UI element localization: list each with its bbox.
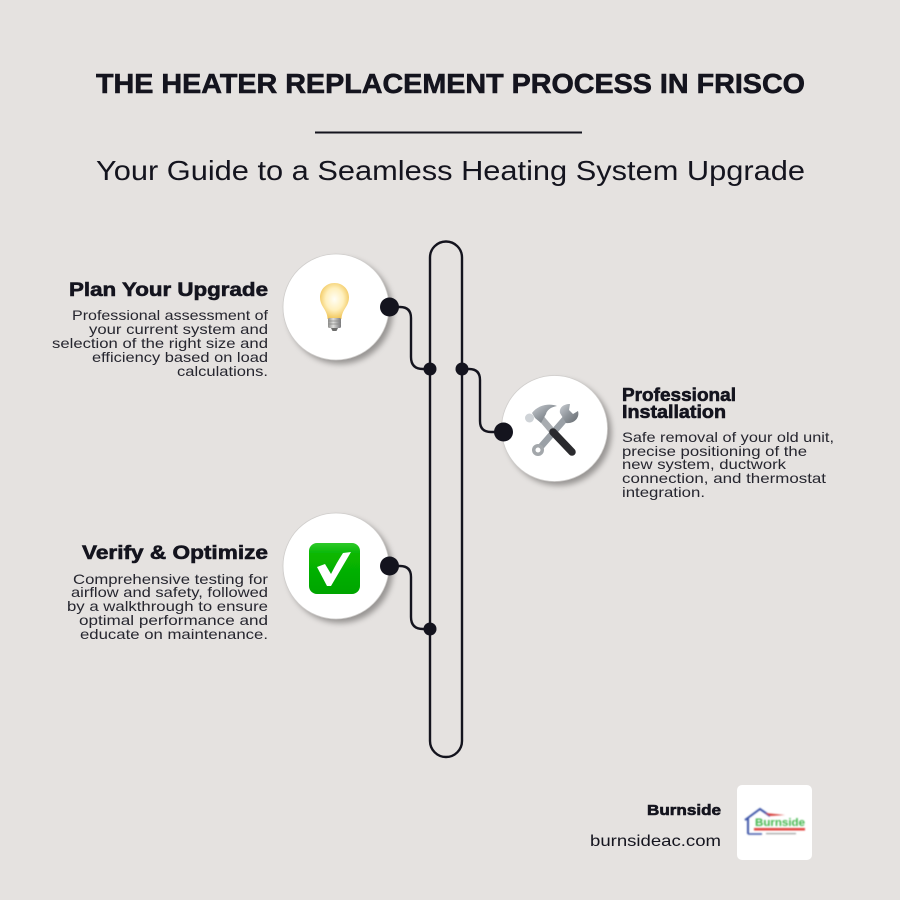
- step 3 node: [380, 556, 399, 576]
- footer website: burnsideac.com: [590, 833, 721, 850]
- step 2 timeline dot: [456, 362, 468, 376]
- icon: hammer and wrench: [525, 404, 578, 456]
- step 3 description: airflow and safety, followed: [71, 584, 268, 600]
- step 3: verify and optimize: [67, 513, 436, 642]
- step 3 timeline dot: [424, 622, 436, 636]
- step 3 description: Comprehensive testing for: [73, 571, 268, 587]
- step 2 description: new system, ductwork: [622, 456, 787, 472]
- step 2 connector: [462, 369, 504, 432]
- step 1 circle: [283, 254, 393, 364]
- step 3 description: [67, 571, 268, 642]
- step 2 heading: [622, 384, 736, 422]
- step 3 description: by a walkthrough to ensure: [67, 598, 268, 614]
- step 2 description: connection, and thermostat: [622, 470, 826, 486]
- step 3 description: educate on maintenance.: [80, 626, 268, 642]
- timeline pill: [430, 242, 462, 757]
- step 1 description: efficiency based on load: [92, 349, 268, 365]
- step 2 circle: [502, 376, 612, 486]
- logo: [737, 785, 812, 860]
- step 2 description: integration.: [622, 484, 705, 500]
- step 1 timeline dot: [424, 362, 436, 376]
- icon: green check mark: [309, 543, 360, 594]
- step 1 description: Professional assessment of: [72, 307, 268, 323]
- step 3 connector: [389, 566, 430, 629]
- step 2 heading: Professional: [622, 384, 736, 405]
- step 1 connector: [389, 307, 430, 369]
- logo: Burnside: [755, 817, 805, 829]
- footer brand name: Burnside: [647, 802, 721, 819]
- step 1 description: calculations.: [177, 363, 268, 379]
- step 2 description: Safe removal of your old unit,: [622, 429, 834, 445]
- step 2 node: [494, 422, 513, 442]
- step 3 circle: [283, 513, 393, 623]
- step 3 description: optimal performance and: [79, 612, 268, 628]
- step 1 description: [52, 307, 268, 379]
- title: THE HEATER REPLACEMENT PROCESS IN FRISCO: [96, 68, 805, 99]
- icon: light bulb: [320, 283, 349, 331]
- step 2: professional installation: [456, 362, 834, 500]
- step 1 heading: Plan Your Upgrade: [69, 280, 268, 301]
- step 2 description: [622, 429, 834, 500]
- step 1: plan your upgrade: [52, 254, 436, 379]
- step 2 description: precise positioning of the: [622, 443, 807, 459]
- subtitle: Your Guide to a Seamless Heating System Upgrade: [96, 155, 805, 186]
- step 3 heading: Verify & Optimize: [82, 543, 268, 564]
- step 2 heading: Installation: [622, 401, 726, 422]
- step 1 description: selection of the right size and: [52, 335, 268, 351]
- step 1 node: [380, 298, 399, 316]
- step 1 description: your current system and: [89, 321, 268, 337]
- title divider: [315, 132, 582, 134]
